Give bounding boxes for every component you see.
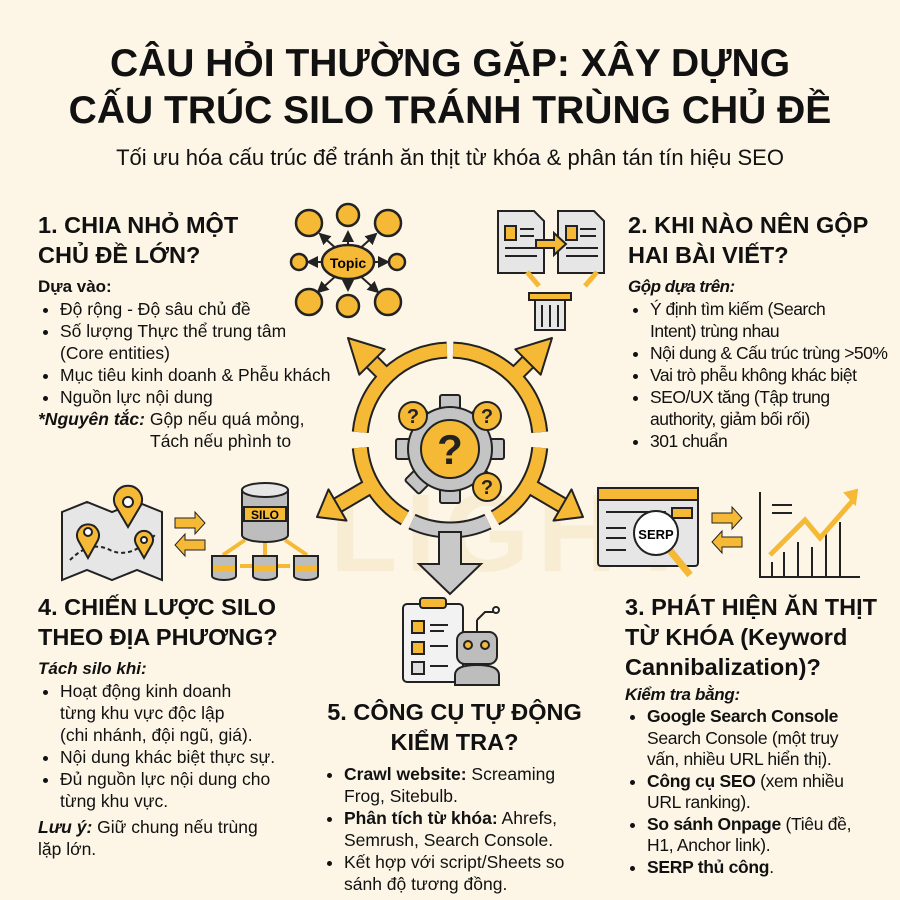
panel: section 3: H1, Anchor link).: [647, 835, 770, 855]
panel: section 3: Kiểm tra bằng:: [625, 685, 740, 704]
panel: section 3: So sánh Onpage (Tiêu đề,: [647, 814, 851, 834]
graphics: ?: [407, 406, 419, 428]
panel: section 2: authority, giảm bối rối): [650, 409, 810, 429]
panel: section 5: [327, 699, 582, 894]
panel: section 5: sánh độ tương đồng.: [344, 874, 507, 894]
panel: section 5: KIỂM TRA?: [391, 729, 518, 755]
panel: section 4: từng khu vực.: [60, 791, 168, 811]
panel: section 1: Độ rộng - Độ sâu chủ đề: [60, 299, 251, 319]
graphics: SILO: [251, 508, 279, 522]
icon: merge documents: [498, 211, 604, 330]
panel: section 4: Lưu ý: Giữ chung nếu trùng: [38, 817, 258, 837]
panel: section 3: Google Search Console: [647, 706, 838, 726]
panel: section 4: từng khu vực độc lập: [60, 703, 224, 723]
panel: section 3: vấn, nhiều URL hiển thị).: [647, 749, 831, 769]
panel: section 2: Vai trò phễu không khác biệt: [650, 365, 857, 385]
graphics: ?: [481, 406, 493, 428]
panel: section 4: Nội dung khác biệt thực sự.: [60, 747, 275, 767]
panel: section 2: [628, 212, 888, 451]
panel: section 3: URL ranking).: [647, 792, 750, 812]
panel: section 4: [38, 594, 278, 859]
panel: section 5: Semrush, Search Console.: [344, 830, 553, 850]
panel: section 2: Nội dung & Cấu trúc trùng >50%: [650, 343, 887, 363]
panel: section 1: Số lượng Thực thể trung tâm: [60, 321, 286, 341]
graphics: SERP: [638, 527, 674, 542]
panel: section 2: 301 chuẩn: [650, 431, 727, 451]
panel: section 1: Tách nếu phình to: [150, 431, 291, 451]
panel: section 1: Mục tiêu kinh doanh & Phễu khách: [60, 365, 330, 385]
panel: section 2: Gộp dựa trên:: [628, 277, 735, 296]
graphics: ?: [481, 477, 493, 499]
panel: section 2: HAI BÀI VIẾT?: [628, 242, 789, 268]
graphics: Topic: [330, 255, 366, 271]
panel: section 4: 4. CHIẾN LƯỢC SILO: [38, 594, 276, 620]
panel: section 1: Nguồn lực nội dung: [60, 387, 213, 407]
panel: section 1: [38, 212, 330, 451]
title: [69, 41, 831, 132]
panel: section 1: Dựa vào:: [38, 277, 112, 296]
panel: section 3: 3. PHÁT HIỆN ĂN THỊT: [625, 594, 877, 620]
panel: section 2: Intent) trùng nhau: [650, 321, 779, 341]
title: CẤU TRÚC SILO TRÁNH TRÙNG CHỦ ĐỀ: [69, 89, 831, 132]
panel: section 2: SEO/UX tăng (Tập trung: [650, 387, 830, 407]
graphics: ?: [437, 426, 463, 473]
panel: section 3: TỪ KHÓA (Keyword: [625, 624, 847, 650]
panel: section 4: THEO ĐỊA PHƯƠNG?: [38, 624, 278, 650]
panel: section 3: Search Console (một truy: [647, 728, 838, 748]
panel: section 4: (chi nhánh, đội ngũ, giá).: [60, 725, 253, 745]
subtitle: Tối ưu hóa cấu trúc để tránh ăn thịt từ khóa & phân tán tín hiệu SEO: [116, 145, 784, 170]
panel: section 3: [625, 594, 877, 876]
panel: section 5: Frog, Sitebulb.: [344, 786, 458, 806]
panel: section 5: Kết hợp với script/Sheets so: [344, 852, 564, 872]
panel: section 1: (Core entities): [60, 343, 170, 363]
icon: center ring with arrows and gear: [317, 338, 583, 594]
icon: silo database: [212, 483, 318, 580]
panel: section 4: Hoạt động kinh doanh: [60, 681, 231, 701]
panel: section 1: 1. CHIA NHỎ MỘT: [38, 212, 238, 238]
panel: section 4: lặp lớn.: [38, 839, 96, 859]
panel: section 5: 5. CÔNG CỤ TỰ ĐỘNG: [327, 699, 582, 725]
panel: section 2: Ý định tìm kiếm (Search: [650, 299, 825, 319]
watermark: LIGHT: [330, 472, 700, 595]
panel: section 2: 2. KHI NÀO NÊN GỘP: [628, 212, 868, 238]
panel: section 1: *Nguyên tắc: Gộp nếu quá mỏng,: [38, 409, 305, 429]
icon: checklist robot: [403, 598, 499, 685]
panel: section 3: Cannibalization)?: [625, 654, 821, 680]
panel: section 1: CHỦ ĐỀ LỚN?: [38, 242, 200, 268]
panel: section 3: Công cụ SEO (xem nhiều: [647, 770, 844, 790]
icon: topic map: [291, 204, 405, 317]
panel: section 4: Tách silo khi:: [38, 659, 147, 678]
panel: section 5: Phân tích từ khóa: Ahrefs,: [344, 808, 557, 828]
panel: section 4: Đủ nguồn lực nội dung cho: [60, 769, 270, 789]
icon: map: [62, 486, 162, 580]
icon: growth chart: [760, 490, 860, 577]
arrows: left exchange: [175, 512, 205, 556]
arrows: right exchange: [712, 507, 742, 553]
panel: section 3: SERP thủ công.: [647, 856, 774, 876]
title: CÂU HỎI THƯỜNG GẶP: XÂY DỰNG: [110, 42, 790, 85]
icon: SERP browser: [598, 488, 698, 575]
panel: section 5: Crawl website: Screaming: [344, 764, 555, 784]
